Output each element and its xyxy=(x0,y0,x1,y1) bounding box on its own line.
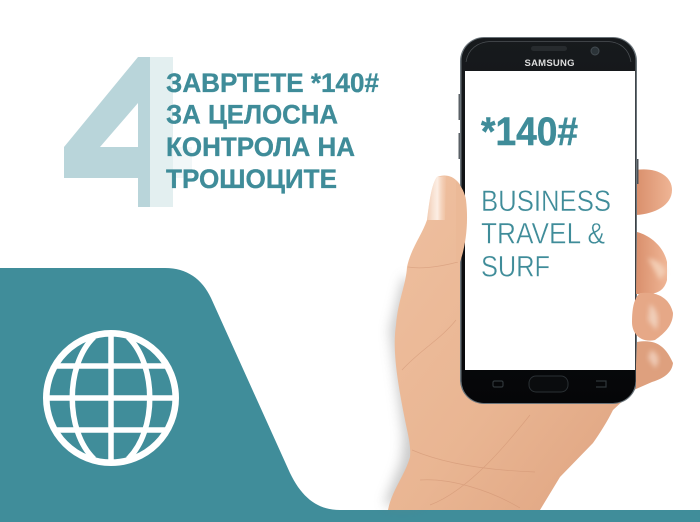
palm and thumb xyxy=(388,176,640,510)
screen label: SURF xyxy=(481,250,550,284)
camera xyxy=(591,47,599,55)
heading: ЗА ЦЕЛОСНА xyxy=(166,100,338,130)
hand shadow xyxy=(384,275,430,505)
screen label xyxy=(481,185,611,284)
palm creases xyxy=(402,262,535,508)
brand: SAMSUNG xyxy=(524,58,574,69)
fingernails xyxy=(648,304,658,330)
hand holding phone xyxy=(384,169,672,510)
phone body xyxy=(460,37,637,404)
teal background shape xyxy=(0,268,700,522)
screen xyxy=(465,71,635,370)
back key xyxy=(596,381,606,387)
thumb highlight xyxy=(427,176,446,220)
smartphone xyxy=(456,37,638,404)
heading: ЗАВРТЕТЕ *140# xyxy=(166,68,379,98)
side buttons xyxy=(458,94,461,120)
speaker xyxy=(531,46,567,51)
icon: globe xyxy=(46,333,176,463)
middle finger xyxy=(636,232,667,294)
recent apps key xyxy=(493,381,503,387)
ring finger xyxy=(632,293,673,341)
top gloss xyxy=(466,42,631,62)
index finger behind phone xyxy=(636,169,672,215)
little finger xyxy=(636,341,673,389)
heading: КОНТРОЛА НА xyxy=(166,132,355,162)
screen label: TRAVEL & xyxy=(481,218,605,250)
heading xyxy=(166,68,379,194)
home button xyxy=(529,376,568,392)
heading: ТРОШОЦИТЕ xyxy=(166,164,337,194)
big numeral 4 xyxy=(64,57,192,207)
screen code: *140# xyxy=(481,110,578,154)
fingers in front of phone xyxy=(632,232,673,389)
screen label: BUSINESS xyxy=(481,185,611,218)
thumb overlap on phone edge xyxy=(456,181,467,262)
